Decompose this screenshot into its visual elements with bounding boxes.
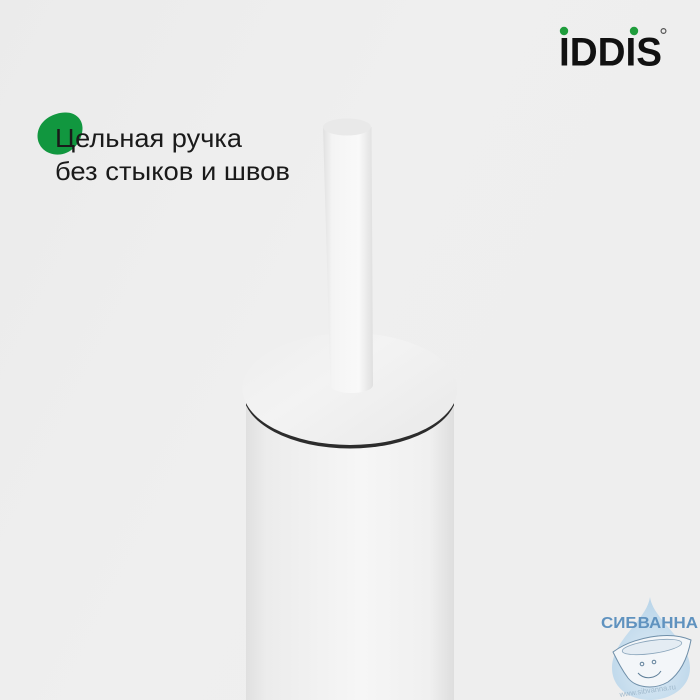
- handle: [323, 127, 373, 393]
- watermark url: www.sibvanna.ru: [618, 682, 676, 699]
- headline text: [55, 123, 290, 186]
- logo dot: first i: [560, 27, 568, 35]
- watermark brand name: СИБВАННА: [601, 615, 698, 632]
- bathtub inner rim: [621, 636, 683, 658]
- logo dot: second i: [630, 27, 638, 35]
- dark gap under lid: [246, 403, 454, 448]
- logo wordmark: IDDIS: [559, 30, 662, 74]
- logo: IDDIS: [559, 27, 666, 74]
- handle top face: [323, 118, 371, 136]
- bathtub: [613, 636, 691, 687]
- water drop: [612, 597, 690, 700]
- headline line 1: Цельная ручка: [55, 123, 243, 153]
- registered mark: [661, 29, 666, 33]
- holder body: [246, 398, 454, 700]
- lid: [242, 333, 458, 445]
- product: toilet brush holder: [242, 118, 458, 700]
- green accent blob: [38, 112, 83, 155]
- headline line 2: без стыков и швов: [55, 156, 290, 186]
- watermark: Sibvanna: [601, 597, 698, 700]
- bathtub face: [638, 660, 661, 678]
